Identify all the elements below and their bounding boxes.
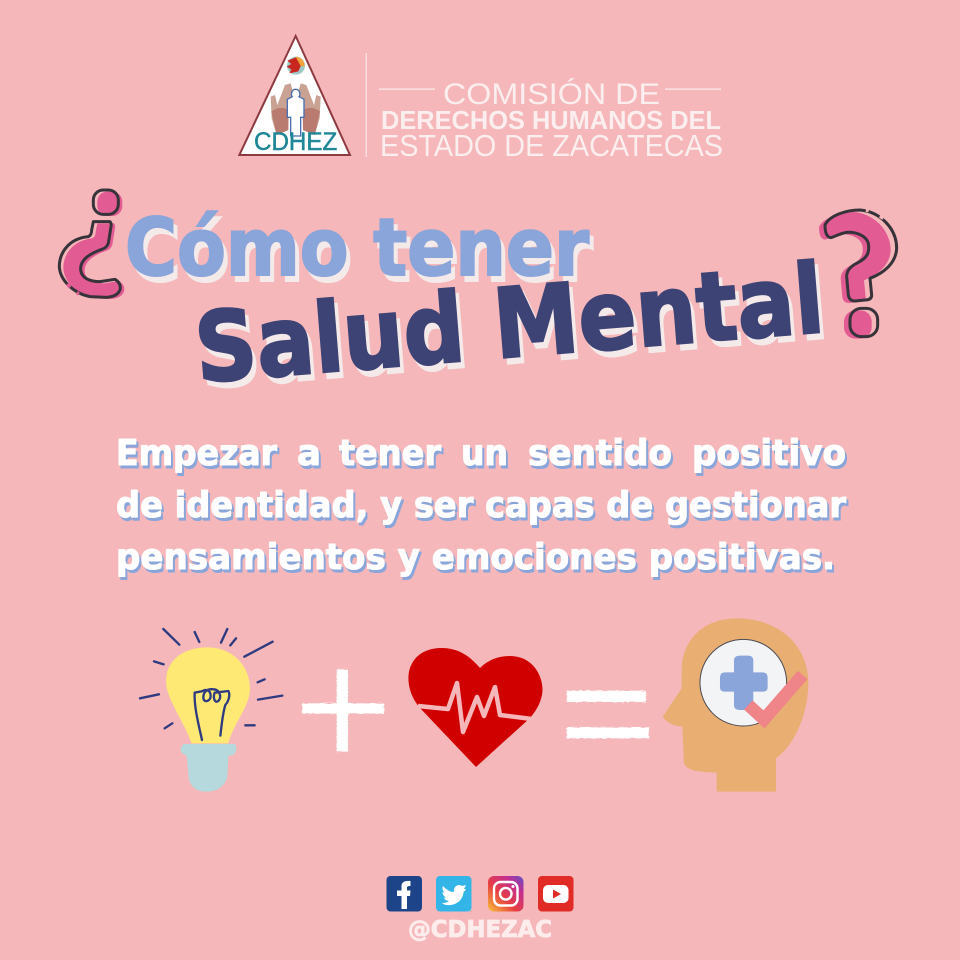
body text: Empezar [116,433,277,474]
title line 2: Salud Mental [191,243,828,405]
body text: a [297,433,321,474]
logo: CDHEZ triangle [239,36,350,156]
body text: un [461,433,508,474]
icon: equals sign [567,691,649,738]
body text: de identidad, y ser capas de gestionar [116,485,846,526]
social handle: @CDHEZAC [408,917,552,943]
icon: heart with pulse [408,648,543,767]
body text: tener [339,433,441,474]
closing question mark [819,210,897,339]
social icon: youtube [538,876,574,912]
icon: head with medical cross [663,618,808,792]
body text [116,433,846,578]
icon: plus sign [302,669,384,752]
organisation name [379,78,723,163]
organisation name: ESTADO DE ZACATECAS [380,129,723,163]
title line 1: Cómo tener [125,202,589,294]
social icon: twitter [436,876,472,912]
logo: CDHEZ triangle: CDHEZ [254,128,337,156]
organisation name: DERECHOS HUMANOS DEL [381,107,721,135]
body text: sentido [528,433,672,474]
organisation name: COMISIÓN DE [443,78,660,111]
body text: pensamientos y emociones positivas. [116,537,835,578]
opening question mark [59,190,124,299]
social icon: instagram [488,876,524,912]
logo divider [366,53,367,157]
body text: positivo [692,433,846,474]
icon: light bulb [140,629,282,792]
social icon: facebook [386,876,422,912]
